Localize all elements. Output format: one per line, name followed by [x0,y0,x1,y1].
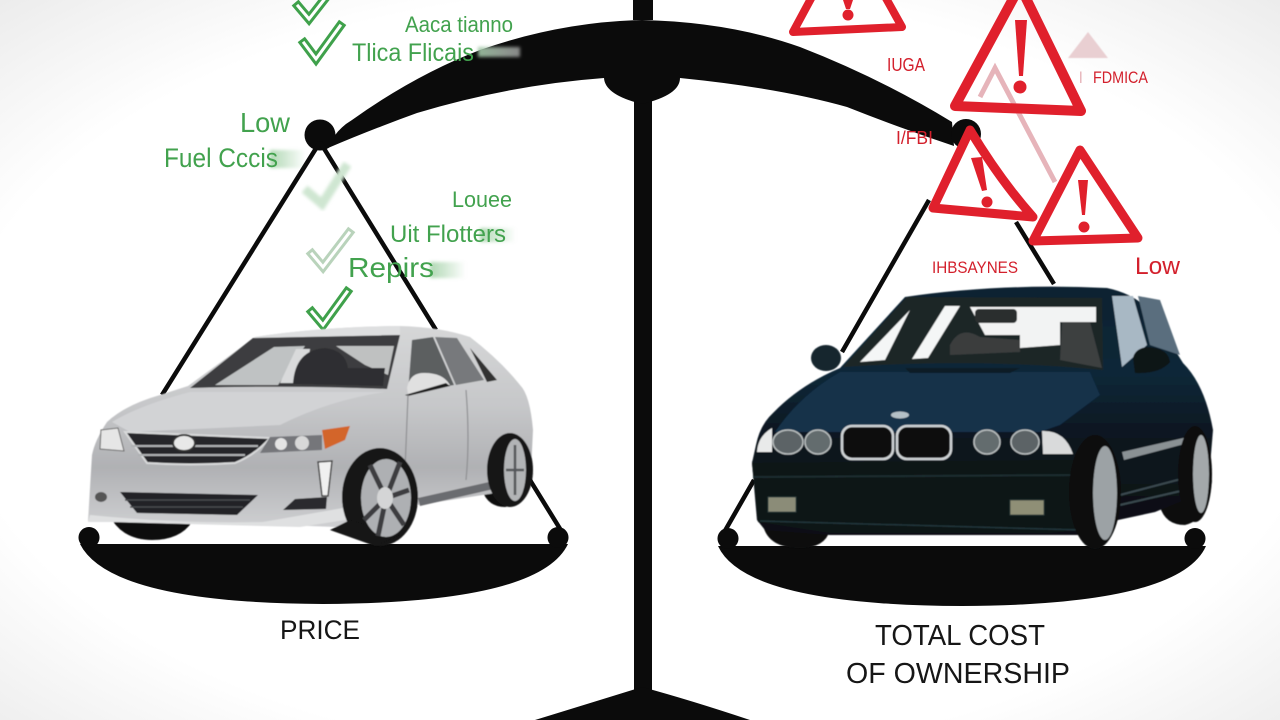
door lines [405,390,468,480]
scale beam [328,20,954,148]
rear wheel [487,433,533,507]
green labels [164,12,513,283]
mirrors [811,345,841,371]
right pan knobs [718,528,1206,549]
left pan strings [162,142,562,532]
red labels: FDMICA [1093,68,1149,87]
red labels: Low [1135,253,1181,280]
red labels: IUGA [887,55,925,75]
green labels: Fuel Cccis [164,143,278,173]
body [752,287,1213,535]
label: total cost of ownership: OF OWNERSHIP [846,658,1070,690]
roof light [253,326,400,341]
panel: green benefits on left side [164,0,520,325]
body [88,326,533,528]
left pan [80,544,568,604]
green labels: Tlica Flicais [352,39,474,67]
front wheel [1069,435,1121,549]
text smears [270,47,520,278]
icon: warning triangles [793,0,1138,241]
red labels: I/FBI [896,128,933,148]
tyres [763,480,1212,548]
green labels: Repirs [348,252,434,283]
icon: exclamation marks [842,0,1090,232]
front wheel [342,448,418,546]
windshield [190,335,400,389]
faint background warning shapes [980,32,1108,182]
side trim [1122,436,1192,460]
front fascia dark band [752,445,1085,462]
kidney grille [842,426,893,459]
right pivot [951,119,981,149]
rear wheel [1178,426,1212,522]
label: total cost of ownership [846,620,1070,690]
fog lights [768,497,796,512]
red labels [887,55,1181,280]
green labels: Uit Flotters [390,221,506,248]
lower bumper [120,492,258,515]
panel: red warnings on right side [793,0,1181,280]
scale post [633,0,653,700]
hood highlight [112,392,385,432]
badge [891,412,909,418]
grille [125,432,270,464]
scale base [535,687,750,720]
right pan strings [722,200,1054,536]
splitter [88,505,365,527]
silver sedan [88,326,533,546]
green labels: Louee [452,187,512,212]
dark blue sedan [752,287,1213,549]
headlights [260,435,322,453]
left pan knobs [79,527,569,548]
icon: green check marks [298,0,349,325]
hood sheen [775,372,1100,432]
headlights [773,430,803,454]
green labels: Low [240,107,291,138]
right pan [718,546,1206,606]
label: price: PRICE [280,615,360,645]
windshield [843,297,1103,370]
green labels: Aaca tianno [405,12,513,37]
far side tyre and front shadow [112,480,527,540]
bumper [752,460,1088,533]
side windows [1112,296,1147,367]
label: total cost of ownership: TOTAL COST [875,620,1045,652]
side windows [408,337,454,393]
badge [173,435,195,451]
red labels: l [1079,70,1083,87]
left pivot [304,120,336,150]
door sill [418,480,498,506]
red labels: IHBSAYNES [932,258,1018,277]
